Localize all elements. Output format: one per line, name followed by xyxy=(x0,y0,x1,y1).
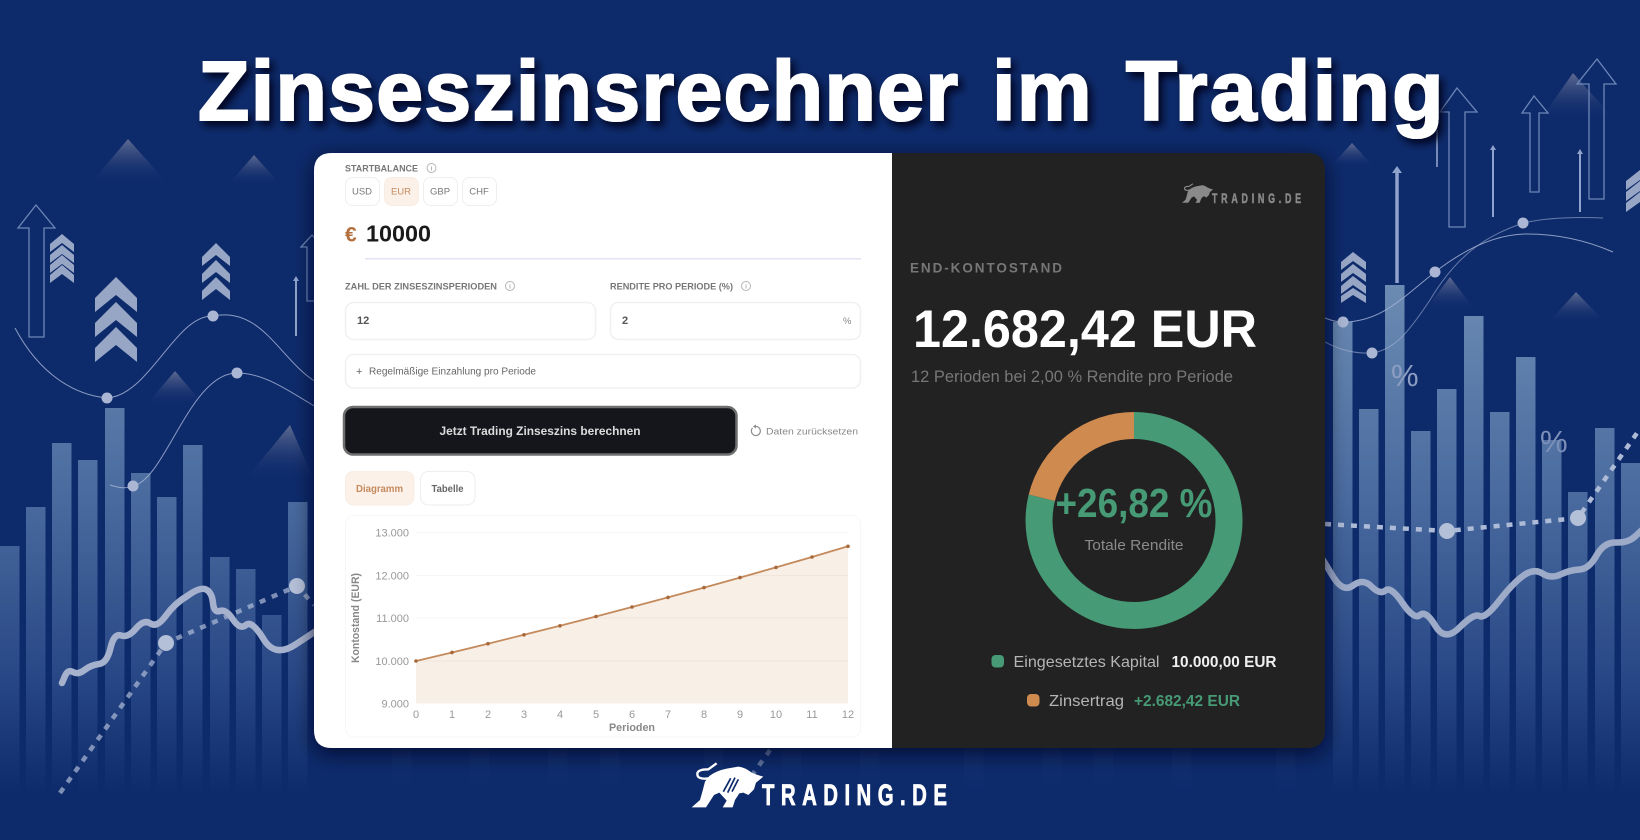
y axis labels xyxy=(375,528,409,710)
logo: Trading.de footer: TRADING.DE xyxy=(762,779,947,812)
x axis labels: 8 xyxy=(701,709,707,721)
x axis labels: 9 xyxy=(737,709,743,721)
percent symbols: % xyxy=(1391,358,1419,393)
legend: capital: Eingesetztes Kapital xyxy=(1014,654,1160,671)
growth line xyxy=(416,546,848,661)
input: return xyxy=(610,302,860,340)
end balance value: 12.682,42 EUR xyxy=(913,300,1257,359)
bar chart background right xyxy=(1333,285,1640,800)
x axis labels: 3 xyxy=(521,709,527,721)
currency buttons: CHF xyxy=(469,186,489,198)
calculate button: Jetzt Trading Zinseszins berechnen xyxy=(440,426,640,438)
decorative triangles xyxy=(90,73,1615,480)
input: regular deposit: Regelmäßige Einzahlung pro Periode xyxy=(369,366,536,378)
icon: bull xyxy=(692,763,763,807)
tab: Tabelle xyxy=(420,472,475,505)
y axis labels: 12.000 xyxy=(375,570,409,582)
x axis labels: 11 xyxy=(806,709,818,721)
chevron icons xyxy=(50,170,1640,362)
legend: interest: Zinsertrag xyxy=(1049,693,1124,710)
x axis labels: 2 xyxy=(485,709,491,721)
panel: calculator card xyxy=(314,153,1325,748)
x axis labels: 7 xyxy=(665,709,671,721)
input: regular deposit xyxy=(346,354,860,388)
outline arrows xyxy=(18,59,1616,337)
start balance amount: 10000 xyxy=(366,220,431,246)
input: return: % xyxy=(843,316,852,327)
thick price line left xyxy=(62,589,316,683)
bar chart background left xyxy=(0,408,308,800)
thin up arrows xyxy=(293,130,1583,336)
donut caption: Totale Rendite xyxy=(1084,537,1184,554)
x axis title: Perioden xyxy=(609,722,655,734)
tab: Diagramm: Diagramm xyxy=(356,483,403,495)
x axis labels: 1 xyxy=(449,709,455,721)
curve nodes xyxy=(102,218,1528,492)
y axis labels: 10.000 xyxy=(375,656,409,668)
title: Zinseszinsrechner im Trading xyxy=(198,44,1446,138)
bars fading behind panel xyxy=(392,700,1296,790)
area fill xyxy=(416,546,848,704)
input: regular deposit: + xyxy=(356,366,362,378)
currency buttons xyxy=(346,178,496,206)
donut chart xyxy=(1039,426,1229,616)
percent symbols: % xyxy=(1540,424,1568,459)
input: periods: 12 xyxy=(357,315,369,327)
label: periods: ZAHL DER ZINSESZINSPERIODEN xyxy=(345,282,497,292)
dotted line nodes xyxy=(158,510,1586,651)
legend: capital xyxy=(992,654,1277,671)
legend: interest xyxy=(1027,693,1240,710)
data points xyxy=(414,544,850,663)
logo: Trading.de footer xyxy=(692,763,947,812)
y axis labels: 9.000 xyxy=(381,698,409,710)
tab: Tabelle: Tabelle xyxy=(432,483,464,495)
logo: small Trading.de: TRADING.DE xyxy=(1212,192,1301,207)
x axis labels: 10 xyxy=(770,709,782,721)
input: return: 2 xyxy=(622,315,628,327)
y axis labels: 13.000 xyxy=(375,528,409,540)
amount underline xyxy=(365,258,861,260)
thin curve lines with nodes xyxy=(15,218,1613,488)
tab: Diagramm xyxy=(346,472,414,505)
currency buttons: EUR xyxy=(391,186,411,198)
thick price line right xyxy=(1323,530,1640,634)
legend: capital: 10.000,00 EUR xyxy=(1172,654,1277,671)
calculate button xyxy=(344,407,736,454)
x axis labels: 12 xyxy=(842,709,854,721)
sub line: 12 Perioden bei 2,00 % Rendite pro Periode xyxy=(911,368,1233,386)
x axis labels: 6 xyxy=(629,709,635,721)
logo: small Trading.de xyxy=(1182,184,1301,207)
label: return per period: RENDITE PRO PERIODE (%) xyxy=(610,282,733,292)
label: end balance: END-KONTOSTAND xyxy=(910,260,1062,276)
currency buttons: USD xyxy=(352,186,372,198)
x axis labels xyxy=(413,709,854,721)
x axis labels: 4 xyxy=(557,709,563,721)
start balance amount: € xyxy=(345,224,357,246)
dotted trend lines xyxy=(60,433,1637,793)
x axis labels: 5 xyxy=(593,709,599,721)
reset link: Daten zurücksetzen xyxy=(766,426,858,438)
line chart xyxy=(346,516,860,737)
donut value: +26,82 % xyxy=(1056,480,1212,526)
reset link xyxy=(751,424,858,438)
input: periods xyxy=(346,302,596,340)
currency buttons: GBP xyxy=(430,186,450,198)
y axis title: Kontostand (EUR) xyxy=(350,573,362,663)
x axis labels: 0 xyxy=(413,709,419,721)
card shadow and background xyxy=(314,153,1325,748)
percent symbols xyxy=(1391,358,1568,459)
label: Startbalance: STARTBALANCE xyxy=(345,164,418,174)
y axis labels: 11.000 xyxy=(376,613,409,625)
legend: interest: +2.682,42 EUR xyxy=(1134,693,1240,710)
